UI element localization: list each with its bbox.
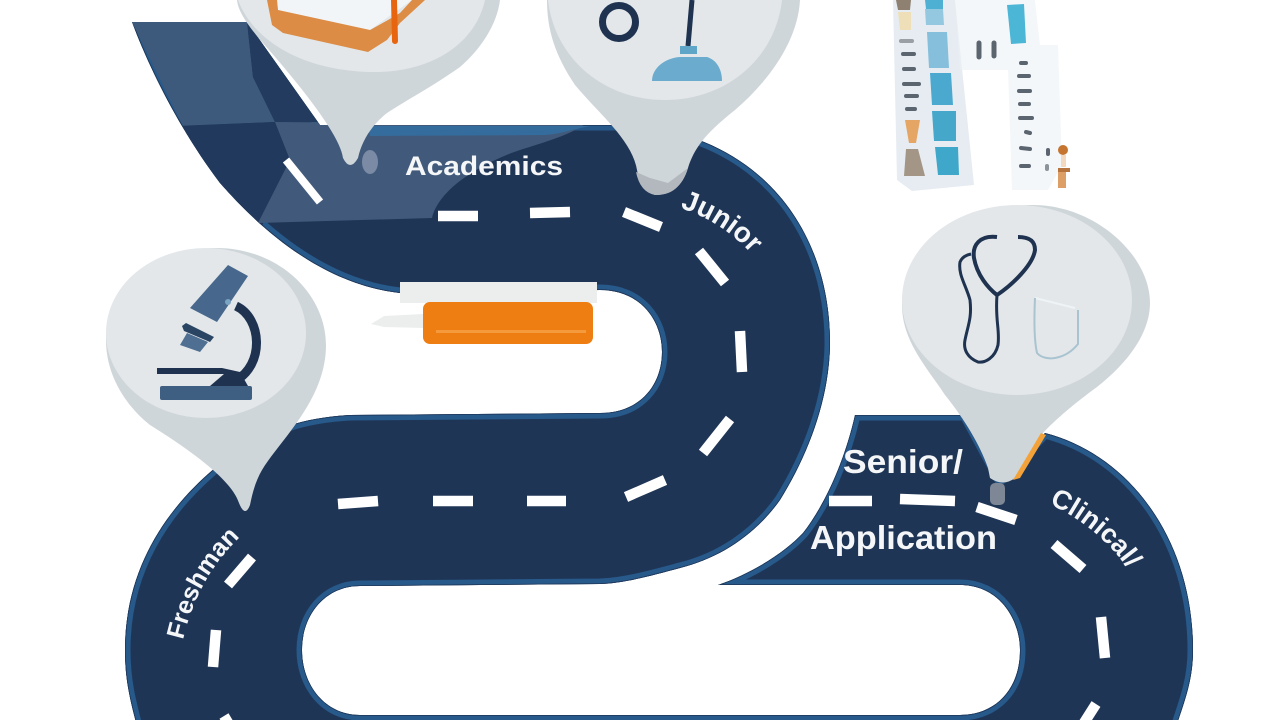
icon: microscope (157, 265, 257, 400)
pin: books (237, 0, 500, 165)
icon: stethoscope (960, 237, 1078, 362)
tip shadow (990, 483, 1005, 505)
label: Freshman: Freshman (166, 530, 239, 638)
pin: microscope (106, 248, 326, 511)
icon: ring (602, 6, 636, 38)
pin: stethoscope (902, 205, 1150, 505)
label: Senior/: Senior/ (843, 443, 963, 480)
left column marks (896, 0, 925, 176)
icon: stand (652, 0, 722, 81)
road labels (166, 151, 1144, 638)
icon: book box (267, 0, 425, 52)
right column marks (979, 43, 1048, 169)
road gloss panels (132, 22, 590, 226)
label: Application: Application (810, 519, 997, 556)
label: Academics: Academics (405, 151, 563, 181)
pencil (371, 282, 597, 344)
grey marker by the academics pin (362, 150, 378, 174)
table cells (925, 0, 1026, 175)
road centre dashes (213, 160, 1105, 720)
pin: lab equipment (547, 0, 800, 195)
document sheets (893, 0, 1070, 191)
label: Junior: Junior (682, 192, 762, 250)
vial (1058, 145, 1070, 188)
tip highlight (1013, 433, 1046, 480)
label: Clinical/: Clinical/ (1053, 490, 1144, 566)
